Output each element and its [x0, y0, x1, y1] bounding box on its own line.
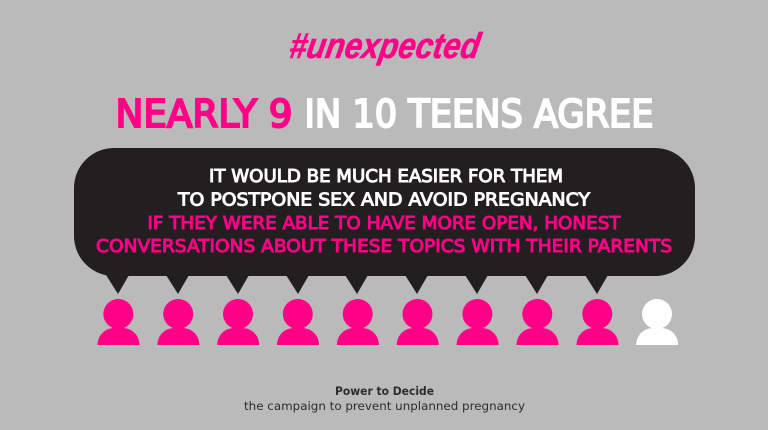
bubble line 4: CONVERSATIONS ABOUT THESE TOPICS WITH THEIR PARENTS	[96, 236, 672, 257]
row of ten people icons	[98, 299, 678, 345]
person 9	[576, 299, 618, 345]
headline: nearly 9: NEARLY 9	[116, 92, 292, 137]
person 3	[217, 299, 259, 345]
person 8	[516, 299, 558, 345]
speech bubble with tails	[74, 148, 695, 294]
person 1	[98, 299, 140, 345]
bubble line 3: IF THEY WERE ABLE TO HAVE MORE OPEN, HONEST	[148, 213, 622, 234]
footer credit	[244, 384, 525, 413]
headline	[116, 92, 654, 137]
person 6	[397, 299, 439, 345]
person 5	[337, 299, 379, 345]
bubble body	[74, 148, 695, 276]
bubble line 1: IT WOULD BE MUCH EASIER FOR THEM	[209, 166, 563, 187]
hashtag title: #unexpected	[287, 25, 484, 66]
person 10 white	[636, 299, 678, 345]
person 4	[277, 299, 319, 345]
person 2	[157, 299, 199, 345]
bubble line 2: TO POSTPONE SEX AND AVOID PREGNANCY	[177, 190, 591, 210]
footer organisation: Power to Decide	[335, 384, 434, 398]
bubble text	[96, 166, 672, 257]
person 7	[457, 299, 499, 345]
headline: in 10 teens agree: IN 10 TEENS AGREE	[304, 92, 654, 137]
footer tagline: the campaign to prevent unplanned pregnancy	[244, 399, 525, 413]
bubble tails	[106, 275, 608, 294]
